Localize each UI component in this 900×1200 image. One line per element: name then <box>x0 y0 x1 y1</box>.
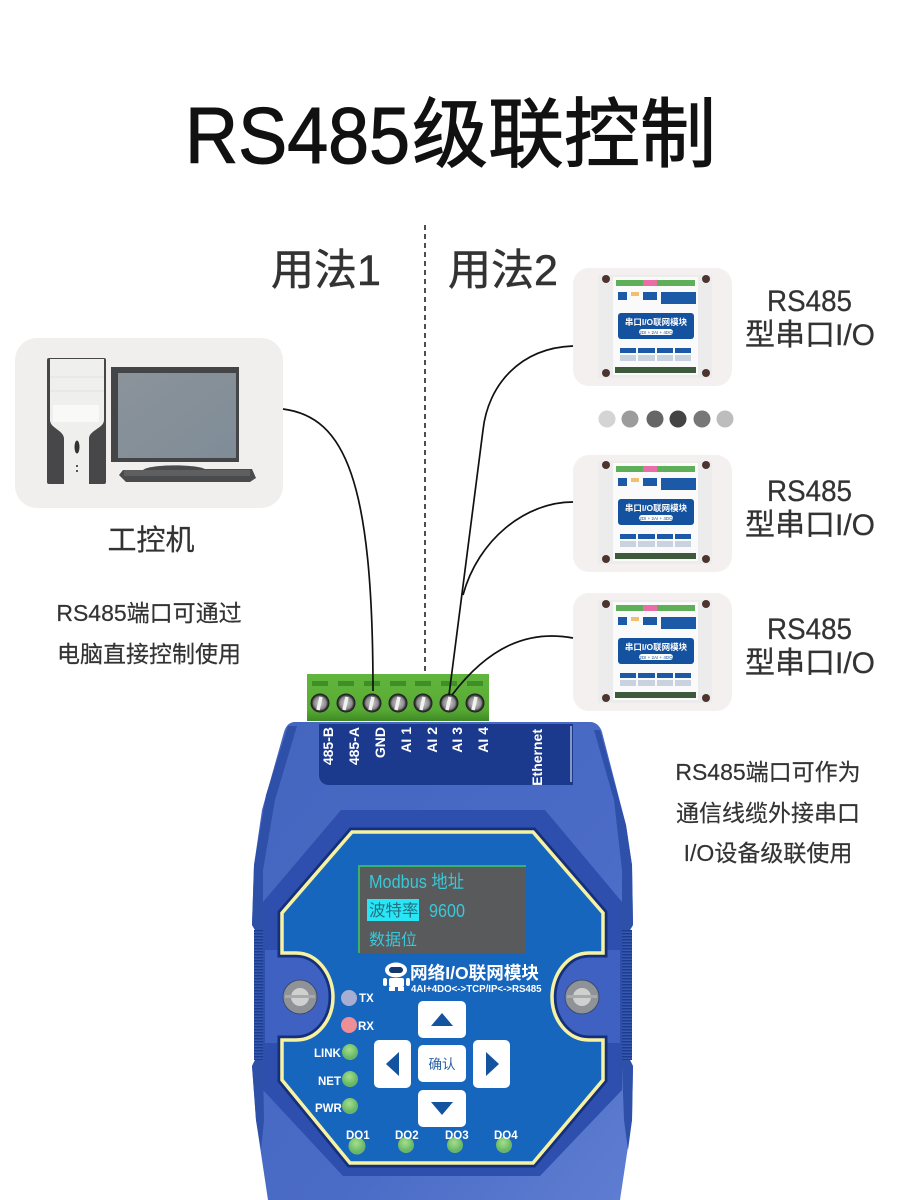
center dashed divider <box>424 225 426 674</box>
title: 级联控制 <box>412 93 716 178</box>
label: module 1: RS485 <box>767 285 852 318</box>
side grip right <box>620 930 632 1060</box>
port labels <box>320 727 545 786</box>
icon: monitor <box>111 367 239 462</box>
panel: industrial PC <box>15 338 283 508</box>
screw notch left <box>265 950 336 1043</box>
icon: robot logo <box>383 962 410 991</box>
module panel 3: 串口I/O联网模块 <box>625 642 688 652</box>
label: module 2: 型串口I/O <box>745 509 875 542</box>
module panel 2: 串口I/O联网模块 <box>625 503 688 513</box>
OLED screen: 9600 <box>429 901 465 921</box>
module panel 3 <box>573 593 732 711</box>
text block: usage 1 description <box>56 600 242 667</box>
label: module 3 <box>745 613 875 680</box>
label: module 1: 型串口I/O <box>745 319 875 352</box>
wire: module 2 to AI 3 <box>463 502 573 595</box>
icon: keyboard <box>119 465 256 482</box>
button: right <box>473 1040 510 1088</box>
text block: usage 2 description: I/O设备级联使用 <box>684 840 852 866</box>
product name: 网络I/O联网模块 <box>410 963 539 983</box>
port labels: AI 2 <box>424 727 440 753</box>
LED labels: DO2 <box>395 1130 419 1142</box>
heading: usage 2: 用法2 <box>448 247 558 295</box>
wire: industrial PC to GND <box>283 409 373 691</box>
text block: usage 2 description <box>675 759 861 866</box>
icon: PC tower <box>47 358 106 484</box>
title <box>185 91 716 180</box>
heading: usage 1: 用法1 <box>271 247 381 295</box>
product subtitle: 4AI+4DO<->TCP/IP<->RS485 <box>411 984 542 995</box>
label: module 2: RS485 <box>767 475 852 508</box>
wire: module 1 to AI 3 <box>449 346 573 695</box>
port labels: 485-A <box>346 727 362 765</box>
button: left <box>374 1040 411 1088</box>
port labels: Ethernet <box>529 729 545 786</box>
module panel 1: 2DI + 2AI + 4DO <box>639 330 673 335</box>
port labels: AI 4 <box>475 727 491 753</box>
screw notch right <box>549 950 620 1043</box>
port labels: AI 1 <box>398 727 414 753</box>
module panel 3: 2DI + 2AI + 4DO <box>639 655 673 660</box>
OLED screen: Modbus 地址 <box>369 872 464 892</box>
label: module 2 <box>745 475 875 542</box>
port labels: 485-B <box>320 727 336 765</box>
module panel 1: 串口I/O联网模块 <box>625 317 688 327</box>
module panel 2: 2DI + 2AI + 4DO <box>639 516 673 521</box>
label: module 3: 型串口I/O <box>745 647 875 680</box>
button: up <box>418 1001 466 1038</box>
ellipsis dots <box>598 410 734 428</box>
LED indicators <box>341 990 512 1154</box>
screw right <box>565 980 599 1014</box>
LED labels: DO1 <box>346 1130 370 1142</box>
LED labels: DO4 <box>494 1130 518 1142</box>
module panel 1 <box>573 268 732 386</box>
OLED screen <box>358 865 526 953</box>
text block: usage 2 description: 通信线缆外接串口 <box>676 800 860 826</box>
button: confirm: 确认 <box>428 1057 456 1072</box>
LED labels: RX <box>358 1021 374 1033</box>
port labels: GND <box>372 727 388 758</box>
navigation buttons <box>374 1001 510 1127</box>
device body <box>252 722 633 1200</box>
LED labels: DO3 <box>445 1130 469 1142</box>
text block: usage 1 description: RS485端口可通过 <box>56 600 242 626</box>
label: module 3: RS485 <box>767 613 852 646</box>
port labels: AI 3 <box>449 727 465 753</box>
port label panel <box>319 724 573 785</box>
label: industrial PC: 工控机 <box>107 524 195 557</box>
faceplate with yellow outline <box>282 832 603 1163</box>
faceplate outer dark outline <box>282 832 603 1163</box>
OLED screen: 波特率 <box>369 901 418 920</box>
OLED screen: 数据位 <box>369 931 417 949</box>
wire: module 3 to AI 3 <box>452 636 573 695</box>
LED labels: PWR <box>315 1103 343 1115</box>
button: down <box>418 1090 466 1127</box>
module panel 2 <box>573 455 732 572</box>
faceplate bevel <box>263 810 622 1176</box>
terminal block <box>307 674 489 721</box>
LED labels <box>314 993 518 1142</box>
screw left <box>283 980 317 1014</box>
title: RS485 <box>185 91 410 180</box>
LED labels: LINK <box>314 1048 342 1060</box>
text block: usage 1 description: 电脑直接控制使用 <box>57 641 241 667</box>
LED labels: TX <box>359 993 374 1005</box>
device: network IO module <box>252 722 633 1200</box>
wires <box>283 346 573 695</box>
LED labels: NET <box>318 1076 341 1088</box>
side grip left <box>254 930 264 1060</box>
text block: usage 2 description: RS485端口可作为 <box>675 759 861 785</box>
label: module 1 <box>745 285 875 352</box>
